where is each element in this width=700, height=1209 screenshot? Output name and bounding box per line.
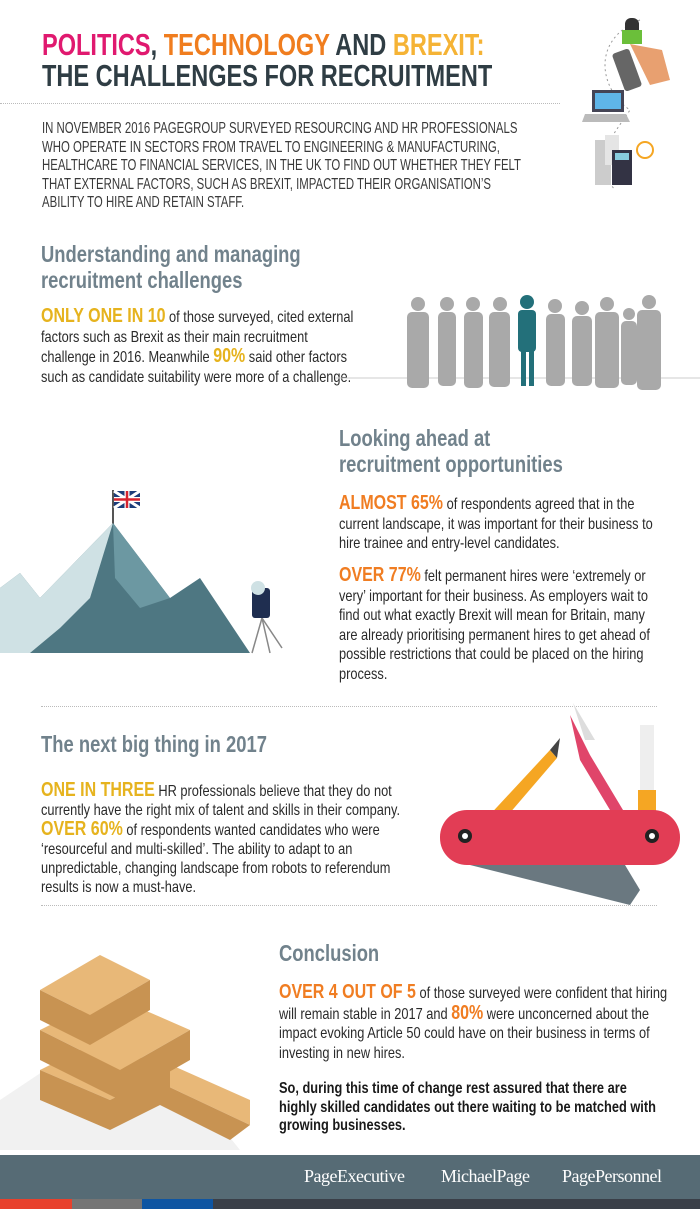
text: next big thing: ONE IN THREE HR professionals believe that they do not	[41, 779, 392, 801]
text: over 77%: find out what exactly Brexit will mean for Britain, many	[339, 607, 645, 624]
text: next big thing: currently have the right mix of talent and skills in their company.	[41, 802, 400, 819]
heading: looking ahead: Looking ahead at	[339, 425, 490, 451]
heading: understanding	[41, 241, 301, 293]
footer colour strip	[0, 1199, 700, 1209]
intro text: IN NOVEMBER 2016 PAGEGROUP SURVEYED RESOURCING AND HR PROFESSIONALS	[42, 120, 517, 137]
heading: understanding: recruitment challenges	[41, 267, 242, 293]
text: conclusion bold	[279, 1080, 656, 1134]
text: over 77%: process.	[339, 666, 387, 682]
footer band with logos: PagePersonnel	[562, 1166, 661, 1186]
text: understanding: ONLY ONE IN 10 of those surveyed, cited external	[41, 305, 353, 327]
heading: looking ahead: recruitment opportunities	[339, 451, 563, 477]
text: next big thing: results is now a must-have.	[41, 879, 196, 896]
heading: understanding: Understanding and managing	[41, 241, 301, 267]
text: conclusion bold: growing businesses.	[279, 1117, 406, 1134]
intro text: THAT EXTERNAL FACTORS, SUCH AS BREXIT, IMPACTED THEIR ORGANISATION’S	[42, 176, 491, 193]
heading: conclusion: Conclusion	[279, 940, 379, 966]
text: over 77%: are already prioritising permanent hires to get ahead of	[339, 626, 650, 644]
text: conclusion stat: investing in new hires.	[279, 1044, 405, 1062]
text: over 77%: possible restrictions that could be placed on the hiring	[339, 646, 644, 663]
intro text: WHO OPERATE IN SECTORS FROM TRAVEL TO ENGINEERING & MANUFACTURING,	[42, 139, 500, 156]
intro text: HEALTHCARE TO FINANCIAL SERVICES, IN THE UK TO FIND OUT WHETHER THEY FELT	[42, 157, 521, 174]
text: almost 65%: current landscape, it was important for their business to	[339, 516, 653, 532]
heading: looking ahead	[339, 425, 563, 477]
text: understanding	[41, 305, 353, 386]
text: conclusion stat: will remain stable in 2017 and 80% were unconcerned about the	[279, 1002, 649, 1024]
text: understanding: such as candidate suitability were more of a challenge.	[41, 368, 351, 386]
illustration: jenga tower	[0, 955, 250, 1150]
text: over 77%	[339, 564, 650, 682]
title: POLITICS, TECHNOLOGY AND BREXIT:	[42, 27, 484, 62]
text: understanding: challenge in 2016. Meanwhile 90% said other factors	[41, 345, 347, 367]
footer band with logos: PageExecutive	[304, 1166, 404, 1186]
text: understanding: factors such as Brexit as their main recruitment	[41, 328, 308, 346]
icons: media devices	[582, 18, 670, 188]
illustration: multi-tool knife	[440, 704, 680, 905]
title: THE CHALLENGES FOR RECRUITMENT	[42, 58, 492, 93]
text: conclusion stat: impact evoking Article 50 could have on their business in terms of	[279, 1025, 650, 1042]
text: next big thing: OVER 60% of respondents wanted candidates who were	[41, 818, 380, 840]
heading: next big thing: The next big thing in 2017	[41, 731, 267, 757]
illustration: people	[335, 295, 700, 390]
text: next big thing: unpredictable, changing landscape from robots to referendum	[41, 860, 390, 877]
text: next big thing	[41, 779, 400, 896]
text: over 77%: very’ important for their business. As employers wait to	[339, 588, 648, 604]
text: over 77%: OVER 77% felt permanent hires were ‘extremely or	[339, 564, 646, 586]
text: almost 65%: hire trainee and entry-level candidates.	[339, 535, 560, 552]
illustration: mountain with flag	[0, 490, 282, 654]
text: conclusion bold: highly skilled candidates out there waiting to be matched with	[279, 1098, 656, 1116]
text: almost 65%: ALMOST 65% of respondents agreed that in the	[339, 492, 634, 514]
text: conclusion bold: So, during this time of change rest assured that there are	[279, 1080, 627, 1097]
footer band with logos: MichaelPage	[441, 1166, 529, 1186]
text: conclusion stat	[279, 981, 667, 1062]
footer band with logos	[0, 1155, 700, 1199]
intro text: ABILITY TO HIRE AND RETAIN STAFF.	[42, 194, 244, 211]
text: next big thing: ‘resourceful and multi-skilled’. The ability to adapt to an	[41, 841, 352, 858]
text: almost 65%	[339, 492, 653, 552]
title	[42, 27, 492, 93]
text: conclusion stat: OVER 4 OUT OF 5 of those surveyed were confident that hiring	[279, 981, 667, 1003]
intro text	[42, 120, 521, 211]
